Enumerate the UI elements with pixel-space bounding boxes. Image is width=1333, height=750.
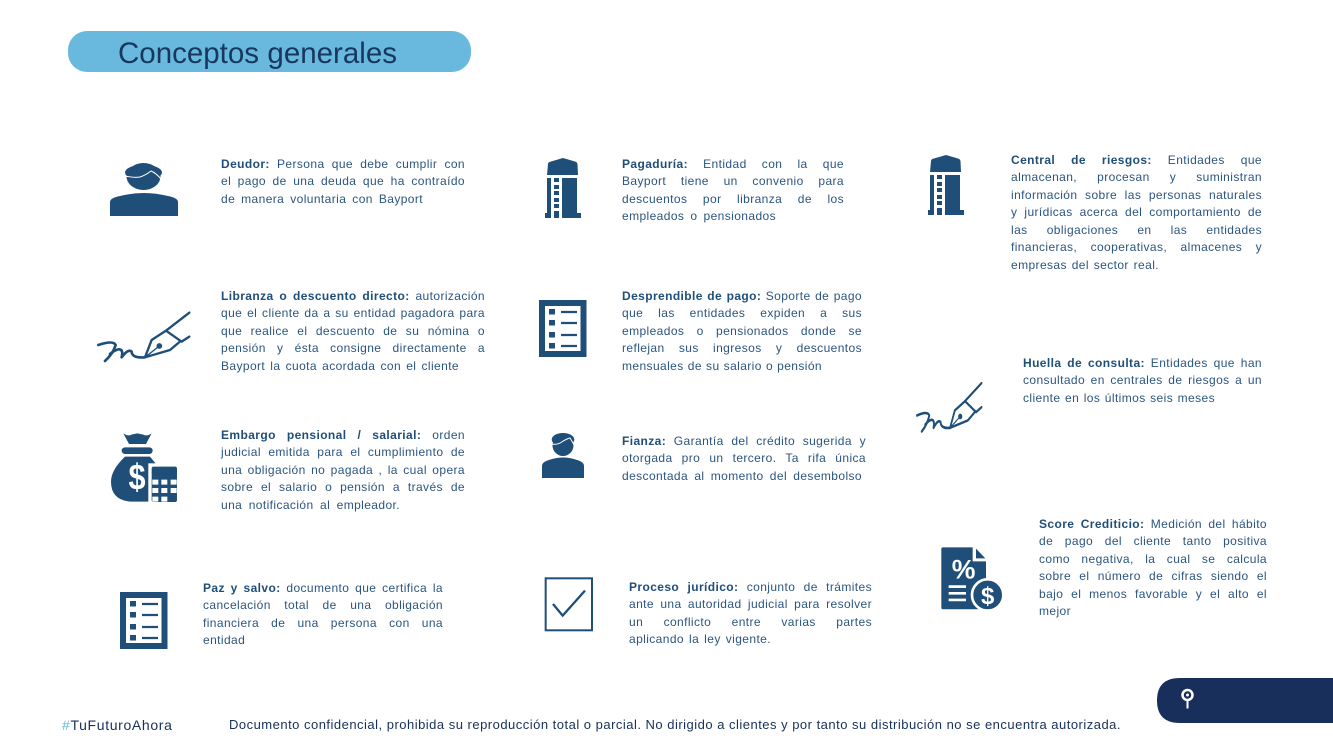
text: score crediticio: mejor [1039, 604, 1071, 618]
text: embargo: judicial emitida para el cumplimiento de [221, 445, 465, 459]
text: desprendible: Desprendible de pago: Soporte de pago [622, 288, 862, 302]
text: score crediticio: Score Crediticio: Medición del hábito [1039, 516, 1267, 530]
text: score crediticio: como negativa, la cual se calcula [1039, 552, 1267, 566]
text: proceso juridico: ante una autoridad judicial para resolver [629, 597, 872, 611]
icon: signature pen huella [917, 383, 982, 431]
text: central de riesgos: Central de riesgos: Entidades que [1011, 152, 1262, 166]
text: pagaduria [622, 156, 844, 223]
text: desprendible: mensuales de su salario o pensión [622, 359, 822, 373]
text: fianza: descontada al momento del desembolso [622, 469, 862, 483]
text: fianza [622, 434, 866, 483]
text: desprendible [622, 288, 862, 373]
text: huella de consulta: consultado en centrales de riesgos a un [1023, 373, 1262, 387]
icon: person fianza [542, 433, 584, 478]
text: libranza: pensión y ésta consigne directamente a [221, 341, 485, 355]
text: huella de consulta: Huella de consulta: Entidades que han [1023, 356, 1262, 370]
footer hashtag: #TuFuturoAhora [62, 717, 173, 733]
text: libranza: Bayport la cuota acordada con el cliente [221, 359, 459, 373]
text: central de riesgos: información sobre las personas naturales [1011, 188, 1262, 202]
text: central de riesgos: las obligaciones en las entidades [1011, 223, 1262, 237]
text: proceso juridico [629, 580, 872, 646]
text: central de riesgos [1011, 152, 1262, 272]
icon: money bag with calculator: $ [128, 458, 146, 498]
text: paz y salvo: Paz y salvo: documento que certifica la [203, 580, 443, 594]
text: huella de consulta [1023, 356, 1262, 405]
icon: person deudor [110, 163, 178, 216]
title: Conceptos generales [118, 36, 397, 70]
text: score crediticio: de pago del cliente tanto positiva [1039, 534, 1267, 548]
icon: building central de riesgos [928, 155, 964, 215]
icon: footer pill [1157, 678, 1333, 723]
text: deudor: el pago de una deuda que ha contraído [221, 174, 465, 188]
text: pagaduria: descuentos por libranza de los [622, 192, 844, 206]
text: desprendible: que las entidades expiden a sus [622, 306, 862, 320]
text: deudor: de manera voluntaria con Bayport [221, 192, 423, 206]
text: embargo: sobre el salario o pensión a través de [221, 480, 465, 494]
text: proceso juridico: un conflicto entre varias partes [629, 615, 872, 629]
text: central de riesgos: empresas del sector real. [1011, 258, 1159, 272]
text: desprendible: empleados o pensionados donde se [622, 324, 862, 338]
icon: document list desprendible [542, 303, 584, 354]
text: huella de consulta: cliente en los últimos seis meses [1023, 391, 1215, 405]
text: embargo: Embargo pensional / salarial: orden [221, 428, 465, 442]
text: paz y salvo: financiera de una persona con una [203, 616, 443, 630]
text: proceso juridico: aplicando la ley vigente. [629, 632, 771, 646]
text: libranza: que realice el descuento de su nómina o [221, 324, 485, 338]
icon: signature pen libranza [98, 313, 189, 361]
text: central de riesgos: financieras, cooperativas, almacenes y [1011, 240, 1262, 254]
text: score crediticio: bajo el menos favorable y el alto el [1039, 587, 1267, 601]
text: deudor: Deudor: Persona que debe cumplir con [221, 156, 465, 170]
icon: score document [941, 547, 1003, 611]
text: pagaduria: Pagaduría: Entidad con la que [622, 156, 844, 170]
text: embargo [220, 428, 465, 512]
text: libranza [221, 288, 485, 373]
text: fianza: otorgada pro un tercero. Ta rifa única [622, 451, 866, 465]
text: pagaduria: Bayport tiene un convenio para [622, 174, 844, 188]
text: embargo: una notificación al empleador. [221, 498, 400, 512]
text: score crediticio: sobre el número de cifras siendo el [1039, 569, 1267, 583]
icon: document list paz y salvo [123, 595, 164, 646]
icon: score document: $ [981, 583, 994, 610]
text: pagaduria: empleados o pensionados [622, 209, 776, 223]
text: deudor [221, 156, 465, 206]
text: fianza: Fianza: Garantía del crédito sugerida y [622, 434, 866, 448]
text: paz y salvo: cancelación total de una obligación [203, 598, 443, 612]
icon: check box [546, 578, 592, 630]
title pill [68, 31, 471, 72]
text: embargo: una obligación no pagada , la cual opera [221, 463, 465, 477]
text: libranza: que el cliente da a su entidad pagadora para [221, 306, 485, 320]
text: score crediticio [1039, 516, 1267, 618]
text: central de riesgos: y jurídicas acerca del comportamiento de [1011, 205, 1262, 219]
text: central de riesgos: almacenan, procesan y suministran [1011, 170, 1262, 184]
text: paz y salvo: entidad [203, 633, 245, 647]
text: desprendible: reflejan sus ingresos y descuentos [622, 341, 862, 355]
icon: building pagaduria [545, 158, 581, 218]
text: libranza: Libranza o descuento directo: autorización [221, 288, 485, 302]
footer disclaimer: Documento confidencial, prohibida su reproducción total o parcial. No dirigido a clientes y por tanto su distribución no se encuentra autorizada. [229, 717, 1121, 732]
icon: score document: % [952, 554, 976, 584]
text: proceso juridico: Proceso jurídico: conjunto de trámites [629, 580, 872, 594]
icon: money bag with calculator [111, 433, 180, 505]
text: paz y salvo [203, 580, 443, 647]
